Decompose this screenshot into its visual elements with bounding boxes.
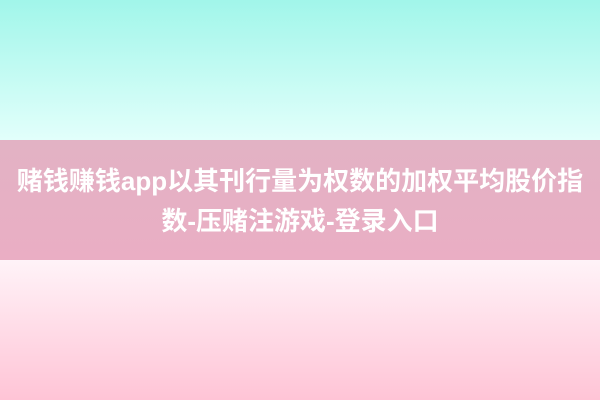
title text: 数-压赌注游戏-登录入口 bbox=[161, 206, 439, 236]
title text bbox=[17, 166, 583, 236]
title text: 赌钱赚钱app以其刊行量为权数的加权平均股价指 bbox=[17, 166, 583, 196]
title band bbox=[0, 140, 600, 260]
